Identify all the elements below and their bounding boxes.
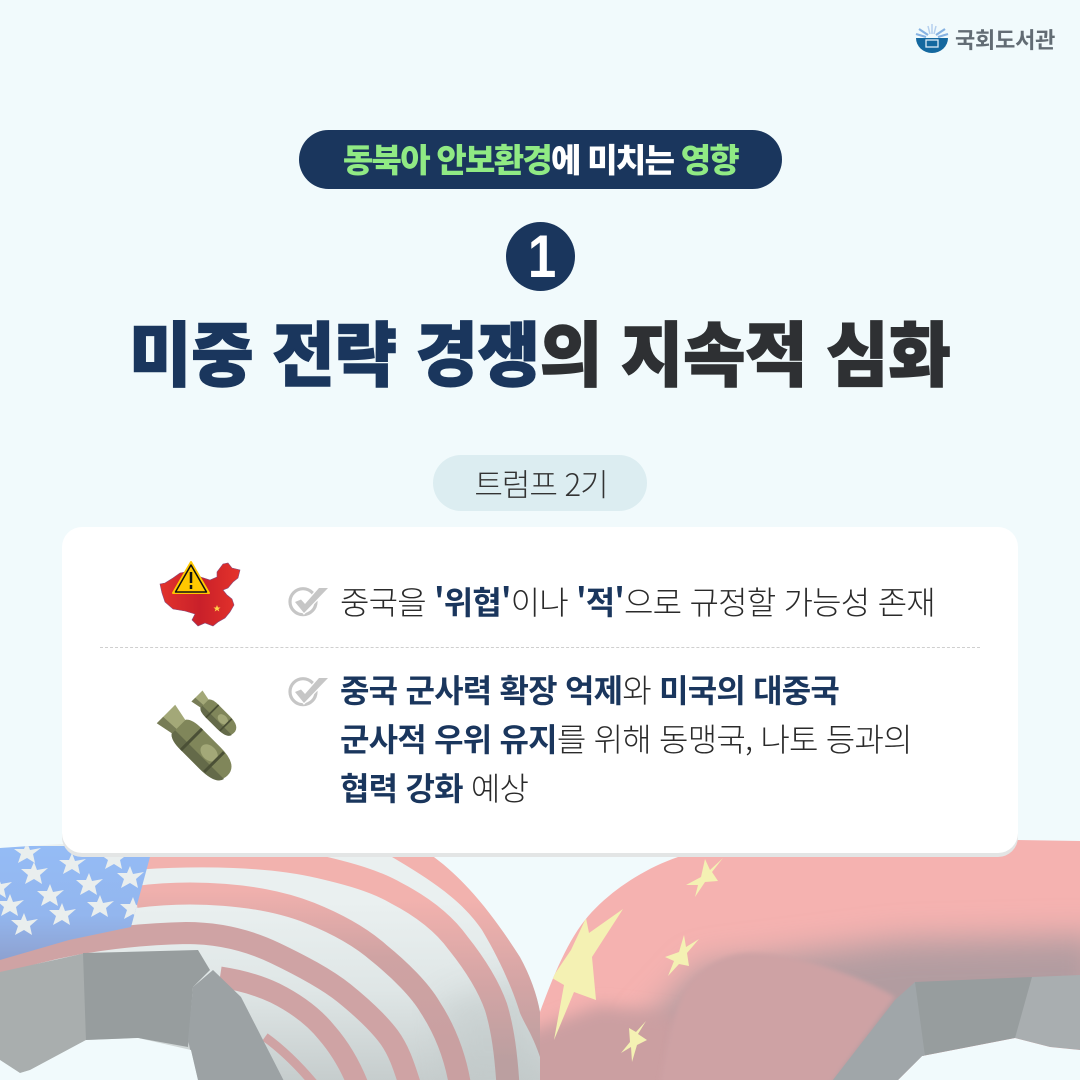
section pill xyxy=(299,130,782,189)
icon: check mark 1 xyxy=(288,587,328,616)
logo wordmark: 국회도서관 xyxy=(955,23,1055,55)
left glove with US flag xyxy=(0,830,541,1080)
right glove cuff xyxy=(915,977,1032,1056)
tag: Trump second term: 트럼프 2기 xyxy=(474,460,608,505)
content card xyxy=(62,527,1018,853)
logo: National Assembly Library xyxy=(916,23,1055,55)
text: second point: 군사적 우위 유지를 위해 동맹국, 나토 등과의 xyxy=(340,715,912,761)
section pill: 동북아 안보환경에 미치는 영향 xyxy=(343,134,738,182)
left glove cuff xyxy=(0,953,86,1073)
divider line xyxy=(100,647,980,648)
text: first point: 중국을 '위협'이나 '적'으로 규정할 가능성 존재 xyxy=(340,578,935,624)
right glove with China flag xyxy=(520,830,1080,1080)
flag stars xyxy=(552,858,723,1062)
text: second point: 중국 군사력 확장 억제와 미국의 대중국 xyxy=(340,666,839,712)
text: second point xyxy=(340,666,912,810)
tag: Trump second term xyxy=(433,455,647,511)
text: second point: 협력 강화 예상 xyxy=(340,764,528,810)
logo emblem xyxy=(916,24,948,53)
icon: check mark 2 xyxy=(288,677,328,706)
canton with stars xyxy=(0,846,150,960)
illustration: boxing gloves xyxy=(0,840,1080,1080)
icon: China map with warning xyxy=(160,561,240,626)
main title: 미중 전략 경쟁의 지속적 심화 xyxy=(129,300,951,401)
number badge xyxy=(506,222,575,291)
icon: bombs xyxy=(156,690,236,780)
number badge: 1 xyxy=(528,223,556,290)
